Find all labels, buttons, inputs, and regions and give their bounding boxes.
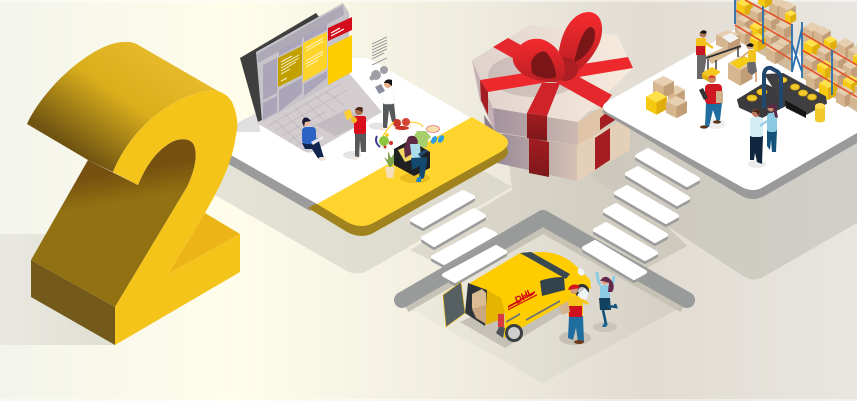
yellow panel text lines <box>306 38 323 67</box>
van rear wheel <box>505 324 523 342</box>
van side panel <box>485 290 505 325</box>
worker in red <box>699 67 726 129</box>
digit two <box>27 42 240 345</box>
orange panel <box>328 35 352 85</box>
rack two frame <box>802 33 857 97</box>
delivery van <box>443 252 591 348</box>
delivery floor diamond <box>405 226 683 383</box>
left platform side <box>225 126 508 236</box>
rack two boxes <box>804 22 857 109</box>
van shadow <box>460 285 575 348</box>
right platform side <box>602 100 857 199</box>
floating icon: arrows <box>383 122 423 136</box>
gift lid <box>472 25 633 145</box>
floating icon: salad <box>376 133 393 148</box>
rack backing <box>735 0 857 112</box>
van logo <box>508 287 537 310</box>
touchpad <box>315 109 368 136</box>
right platform <box>602 0 857 199</box>
floating icon: hat <box>426 126 440 132</box>
gears icon <box>370 66 388 80</box>
gift box <box>472 12 633 181</box>
road chevron <box>402 218 687 306</box>
gift base <box>484 115 630 181</box>
right stairs <box>584 150 698 281</box>
shadow of digit two <box>0 234 115 345</box>
laptop lid back <box>240 13 320 122</box>
worker at table <box>696 30 713 79</box>
woman packing <box>728 42 757 86</box>
van interior <box>465 283 487 326</box>
digit top side face <box>27 42 230 172</box>
floating icon: steak <box>392 118 412 131</box>
left stairs <box>412 192 505 284</box>
screen panels <box>263 24 327 120</box>
van windscreen strip <box>520 252 570 279</box>
floating document <box>372 37 387 65</box>
yellow roll <box>815 103 825 122</box>
laptop <box>237 3 382 152</box>
van side window <box>540 277 565 296</box>
van cargo boxes <box>472 289 486 324</box>
right platform top <box>603 24 857 190</box>
gift bow <box>513 12 602 82</box>
couple talking <box>748 103 778 168</box>
plant <box>384 151 398 178</box>
laptop screen <box>256 3 349 122</box>
cheering woman <box>593 272 617 332</box>
dark gold panel <box>278 46 302 87</box>
person sitting on laptop <box>302 118 326 161</box>
woman on armchair <box>394 136 430 183</box>
shadow of right platform <box>590 110 857 280</box>
yellow panel <box>303 32 327 82</box>
van rear door <box>443 282 465 327</box>
floating icon: t-shirt <box>414 131 431 148</box>
screen top band <box>257 5 344 63</box>
red panel <box>328 17 352 41</box>
conveyor <box>738 74 826 118</box>
rack one frame <box>735 0 802 78</box>
courier <box>559 285 591 345</box>
laptop shadow <box>237 112 260 132</box>
shadow of left platform <box>215 100 512 274</box>
digit inner face <box>31 139 196 307</box>
van lower trim <box>496 300 560 338</box>
man with tablet <box>369 79 396 130</box>
keyboard <box>268 84 347 146</box>
gold panel text lines <box>281 55 299 81</box>
digit front face <box>113 90 240 345</box>
van body <box>468 252 591 338</box>
rack one boxes <box>737 0 796 64</box>
warehouse racks <box>735 0 857 112</box>
yellow band <box>317 117 508 226</box>
van headlight <box>576 267 586 277</box>
left platform <box>206 3 508 236</box>
shadow of gift and stair floor <box>410 100 687 270</box>
digit base left face <box>31 260 115 345</box>
conveyor arch <box>764 68 781 108</box>
box pile <box>646 76 687 118</box>
packing table <box>705 30 741 72</box>
floating icon: flip flops <box>430 134 445 145</box>
left platform top <box>206 58 507 226</box>
van front wheel <box>575 284 589 298</box>
van tail light <box>498 314 504 327</box>
red panel text lines <box>331 28 344 36</box>
digit base top face <box>168 213 240 274</box>
van logo: DHL <box>513 287 536 307</box>
man in red with folder <box>343 107 366 160</box>
laptop base <box>257 72 382 152</box>
